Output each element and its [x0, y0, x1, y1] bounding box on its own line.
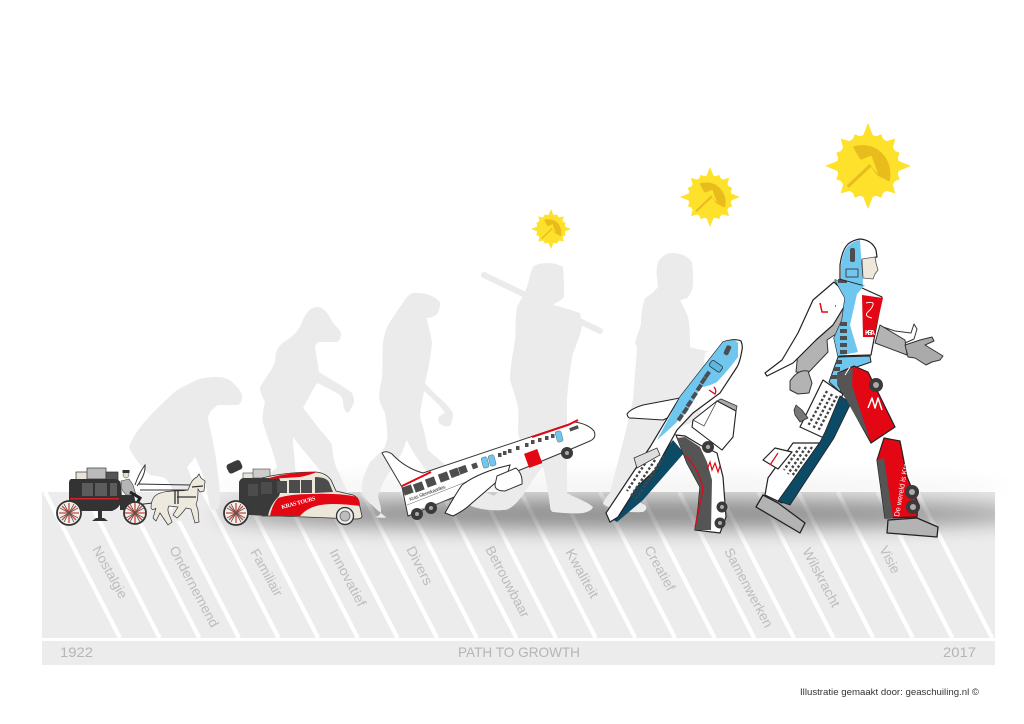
- front seat and driver: [120, 470, 140, 510]
- small ship: [634, 448, 660, 468]
- helmet: [840, 239, 878, 285]
- silhouette: modern human: [603, 253, 710, 512]
- airplane wheels: [411, 447, 573, 520]
- red roof strip: [269, 472, 317, 479]
- blue nose: [657, 340, 738, 440]
- front arm: [878, 324, 917, 343]
- silhouette: knuckle-walking ape: [129, 377, 242, 521]
- rear thigh plane section: [800, 380, 843, 438]
- airline lettering: Kras Sterrekaarties: [409, 484, 447, 503]
- timeline value labels: Ondernemend: [166, 543, 222, 630]
- Kras chest logo: KRA: [865, 330, 875, 337]
- blue doors: [481, 430, 563, 469]
- face: [862, 257, 878, 279]
- icon: medium sun with parasol: [680, 167, 740, 227]
- hand: [905, 337, 943, 365]
- coach body: [69, 479, 122, 511]
- timeline value labels: Betrouwbaar: [482, 543, 533, 621]
- calf lettering: De wereld is Kras: [892, 458, 911, 517]
- icon: large sun with parasol: [825, 123, 911, 209]
- robot wheels: [869, 378, 920, 514]
- floor: striped timeline path: [42, 492, 995, 641]
- timeline value labels: Creatief: [641, 543, 678, 594]
- engine: [495, 468, 522, 491]
- small ship on thigh: [794, 405, 808, 422]
- tui mark: [709, 387, 716, 394]
- credit line: Illustratie gemaakt door: geaschuiling.nl ©: [800, 687, 979, 698]
- airplane with Kras branding: [382, 420, 595, 520]
- icon: small sun with parasol: [531, 209, 571, 249]
- plane windows: [677, 345, 732, 422]
- luggage on coach: [76, 468, 118, 480]
- flying suitcase: [226, 459, 243, 474]
- white horse: [151, 474, 205, 525]
- timeline value labels: Nostalgie: [89, 543, 131, 601]
- red front calf: [877, 438, 918, 518]
- timeline value labels: Wilskracht: [799, 545, 843, 610]
- timeline bar with years: 1922: [60, 644, 93, 660]
- tui mark on wing: [820, 303, 836, 312]
- blue hip: [829, 356, 871, 392]
- luggage on bus: [243, 469, 270, 479]
- timeline bar with years: [42, 641, 995, 665]
- bus wheels: [224, 501, 354, 525]
- red side sweep: [270, 494, 360, 516]
- timeline value labels: Divers: [403, 544, 436, 588]
- silhouette: human with club: [484, 263, 600, 513]
- robot figure built from vehicles: [756, 239, 943, 537]
- timeline bar with years: PATH TO GROWTH: [458, 644, 580, 660]
- back forearm and fist: [790, 300, 850, 394]
- fuselage: [382, 422, 595, 516]
- timeline value labels: Familiair: [247, 546, 286, 599]
- red front thigh: [838, 366, 895, 443]
- timeline value labels: Kwaliteit: [562, 546, 602, 601]
- tail fin: [763, 448, 792, 469]
- engine cowling: [692, 399, 737, 450]
- timeline bar with years: 2017: [943, 644, 976, 660]
- coach stand: [92, 518, 108, 521]
- torso: [834, 280, 882, 356]
- stagecoach with horse: [57, 465, 205, 525]
- bus lettering: KRAS TOURS: [281, 496, 316, 511]
- upper fuselage: [606, 340, 742, 522]
- Kras logo: [524, 449, 542, 468]
- rear foot: [756, 495, 805, 533]
- windows: [402, 425, 579, 496]
- blue torso panel: [834, 280, 865, 356]
- ground shadow: [210, 474, 1024, 529]
- bus coach rear: [239, 478, 281, 516]
- hybrid wheels: [702, 441, 728, 528]
- hybrid: plane with first leg: [606, 340, 742, 533]
- side blue window: [709, 360, 723, 373]
- silhouette: early human: [362, 293, 504, 518]
- wing: [445, 465, 510, 516]
- rear calf plane section: [765, 443, 825, 503]
- wheels: [57, 501, 146, 525]
- timeline value labels: Samenwerken: [721, 545, 776, 630]
- Kras chest logo: [862, 295, 883, 337]
- first leg bus: [676, 435, 726, 533]
- bus cream body: [262, 472, 362, 519]
- coach-bus hybrid with Kras Tours: [224, 469, 362, 525]
- whip and reins: [134, 465, 195, 505]
- navy rear thigh and calf: [778, 396, 851, 505]
- plane rear wing: [627, 398, 680, 420]
- lower body navy leg: [610, 440, 684, 522]
- timeline value labels: Visie: [876, 543, 903, 576]
- timeline value labels: [89, 543, 903, 630]
- bus windows: [248, 477, 333, 496]
- front foot: [887, 518, 938, 537]
- back wing arm: [765, 282, 850, 376]
- red stripes: [402, 420, 578, 486]
- silhouette: upright ape: [260, 307, 355, 514]
- timeline value labels: Innovatief: [326, 546, 369, 609]
- dot grid: [627, 456, 664, 499]
